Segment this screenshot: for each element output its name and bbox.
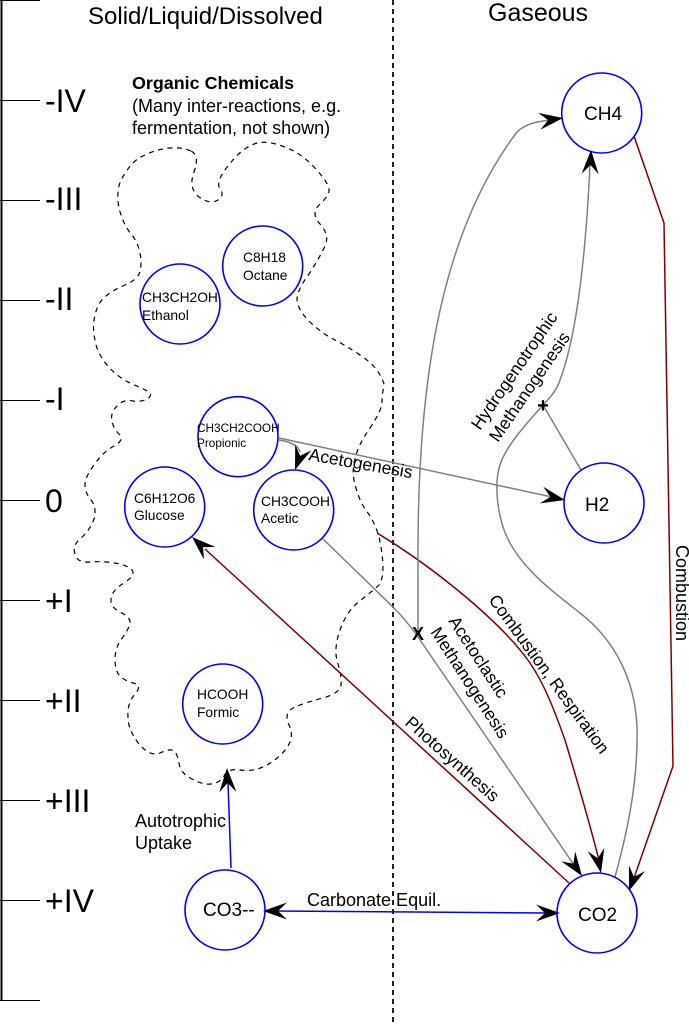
node: octane: Octane xyxy=(243,268,288,283)
label: carbonate equilibrium: Carbonate Equil. xyxy=(307,890,441,910)
axis labels: -III xyxy=(45,181,82,217)
axis labels xyxy=(45,83,95,919)
organic chemicals note xyxy=(132,73,341,138)
node: acetic: CH3COOH xyxy=(261,494,330,509)
node: glucose: Glucose xyxy=(134,508,185,523)
node: glucose: C6H12O6 xyxy=(134,491,196,506)
arrow: photosynthesis xyxy=(186,531,569,883)
arrow: carbonate equilibrium xyxy=(263,902,560,922)
axis labels: -IV xyxy=(45,83,87,119)
arrow: acetoclastic methanogenesis to CO2 xyxy=(323,539,589,881)
label: autotrophic uptake xyxy=(135,811,226,853)
label: hydrogenotrophic methanogenesis: Hydrogenotrophic xyxy=(467,308,562,433)
node: propionic: CH3CH2COOH xyxy=(197,421,280,435)
arrow: combustion and respiration xyxy=(377,533,609,875)
heading: solid liquid dissolved: Solid/Liquid/Dissolved xyxy=(88,3,323,30)
node: acetic xyxy=(254,470,334,550)
node: CO3: CO3-- xyxy=(203,900,255,921)
organic chemicals boundary xyxy=(74,142,384,784)
node: octane xyxy=(223,226,303,306)
node: CO2: CO2 xyxy=(578,905,617,926)
node: ethanol: CH3CH2OH xyxy=(142,290,218,305)
node: CH4: CH4 xyxy=(584,104,622,125)
junction marker: plus: + xyxy=(537,395,549,417)
axis labels: -I xyxy=(45,381,65,417)
node: octane: C8H18 xyxy=(243,250,286,265)
node: CO3 xyxy=(185,870,265,950)
organic chemicals note: Organic Chemicals xyxy=(132,73,294,93)
axis labels: +II xyxy=(45,683,81,719)
line: H2 to junction xyxy=(543,405,581,470)
label: acetoclastic methanogenesis: Methanogenesis xyxy=(427,623,513,742)
label: autotrophic uptake: Autotrophic xyxy=(135,811,226,831)
arrow: acetoclastic methanogenesis to CH4 xyxy=(418,110,564,633)
arrow: combustion xyxy=(621,136,673,894)
label: hydrogenotrophic methanogenesis: Methanogenesis xyxy=(485,328,574,445)
arrow: propionic to H2 xyxy=(279,438,567,508)
axis labels: +III xyxy=(45,783,90,819)
arrow: hydrogenotrophic methanogenesis xyxy=(497,150,637,877)
node: ethanol: Ethanol xyxy=(142,308,189,323)
node: acetic: Acetic xyxy=(261,511,299,526)
node: H2: H2 xyxy=(585,495,609,516)
node: propionic: Propionic xyxy=(197,436,246,450)
node: H2 xyxy=(564,463,644,543)
label: combustion, respiration: Combustion, Respiration xyxy=(485,591,614,757)
arrow: autotrophic uptake xyxy=(219,768,236,868)
organic chemicals note: (Many inter-reactions, e.g. xyxy=(132,96,341,116)
node: formic xyxy=(183,664,263,744)
oxidation state axis xyxy=(0,0,95,1000)
axis labels: -II xyxy=(45,281,73,317)
label: acetogenesis: Acetogenesis xyxy=(307,444,414,482)
label: autotrophic uptake: Uptake xyxy=(135,833,192,853)
label: photosynthesis: Photosynthesis xyxy=(401,712,504,806)
axis labels: +IV xyxy=(45,883,95,919)
node: propionic xyxy=(197,397,280,477)
node: ethanol xyxy=(140,264,220,344)
node: glucose xyxy=(125,467,205,547)
organic chemicals note: fermentation, not shown) xyxy=(132,118,330,138)
node: formic: Formic xyxy=(197,705,239,720)
node: CH4 xyxy=(562,73,642,153)
junction marker: x: X xyxy=(412,624,424,644)
label: acetoclastic methanogenesis: Acetoclastic xyxy=(445,612,512,702)
axis labels: +I xyxy=(45,583,73,619)
node: CO2 xyxy=(557,873,637,953)
axis labels: 0 xyxy=(45,483,63,519)
arrow: acetogenesis xyxy=(279,440,311,473)
node: formic: HCOOH xyxy=(197,687,248,702)
